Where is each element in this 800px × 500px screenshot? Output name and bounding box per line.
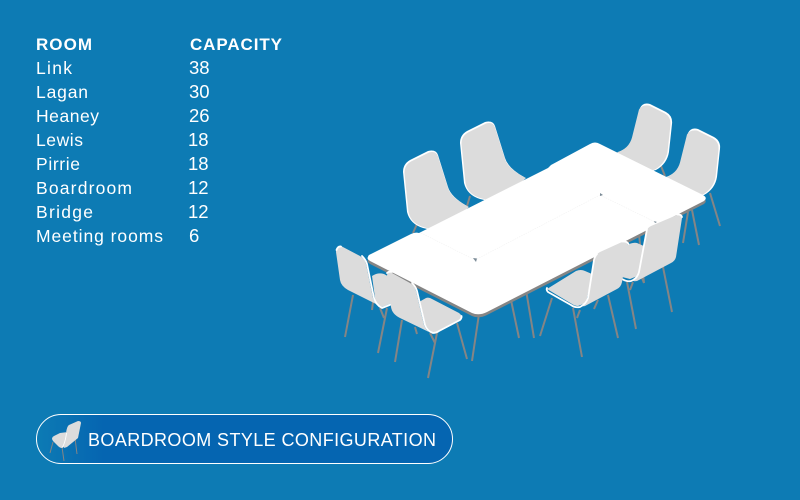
back row chairs xyxy=(403,104,720,245)
front left chairs xyxy=(336,246,467,378)
table seams xyxy=(421,195,655,260)
chair: front left 1 xyxy=(336,246,395,353)
chair: back left 1 xyxy=(403,150,470,233)
room names xyxy=(36,58,163,246)
table underside xyxy=(368,147,706,317)
chair: front left 2 xyxy=(387,272,467,378)
table surface xyxy=(368,142,706,314)
pill background xyxy=(36,414,452,464)
room names: Pirrie xyxy=(36,154,80,174)
table top xyxy=(368,142,706,317)
front right chairs xyxy=(540,214,682,357)
chair: back right 1 xyxy=(617,104,672,178)
capacity values: 30 xyxy=(189,81,210,102)
room names: Lagan xyxy=(36,82,88,102)
capacity values: 18 xyxy=(188,153,209,174)
capacity values: 38 xyxy=(189,57,210,78)
capacity values: 18 xyxy=(188,129,209,150)
capacity values: 12 xyxy=(188,177,209,198)
callout label: BOARDROOM STYLE CONFIGURATION xyxy=(88,430,436,450)
capacity values: 12 xyxy=(188,201,209,222)
table header xyxy=(36,35,283,54)
room names: Bridge xyxy=(36,202,93,222)
table legs xyxy=(472,234,644,361)
capacity values xyxy=(188,57,210,246)
table header: ROOM xyxy=(36,35,92,54)
room names: Boardroom xyxy=(36,178,132,198)
icon: chair xyxy=(50,421,81,461)
chair: front right 2 xyxy=(622,214,682,329)
capacity values: 6 xyxy=(189,225,199,246)
room names: Link xyxy=(36,58,72,78)
capacity values: 26 xyxy=(189,105,210,126)
room names: Lewis xyxy=(36,130,83,150)
chair: back left 2 xyxy=(460,122,526,204)
boardroom table and chairs illustration xyxy=(336,104,720,378)
chair: front right 1 xyxy=(540,241,628,357)
capacity table xyxy=(36,35,283,246)
room names: Heaney xyxy=(36,106,99,126)
callout: boardroom style configuration xyxy=(36,414,452,464)
table header: CAPACITY xyxy=(190,35,283,54)
chair: back right 2 xyxy=(665,128,720,245)
room names: Meeting rooms xyxy=(36,226,163,246)
